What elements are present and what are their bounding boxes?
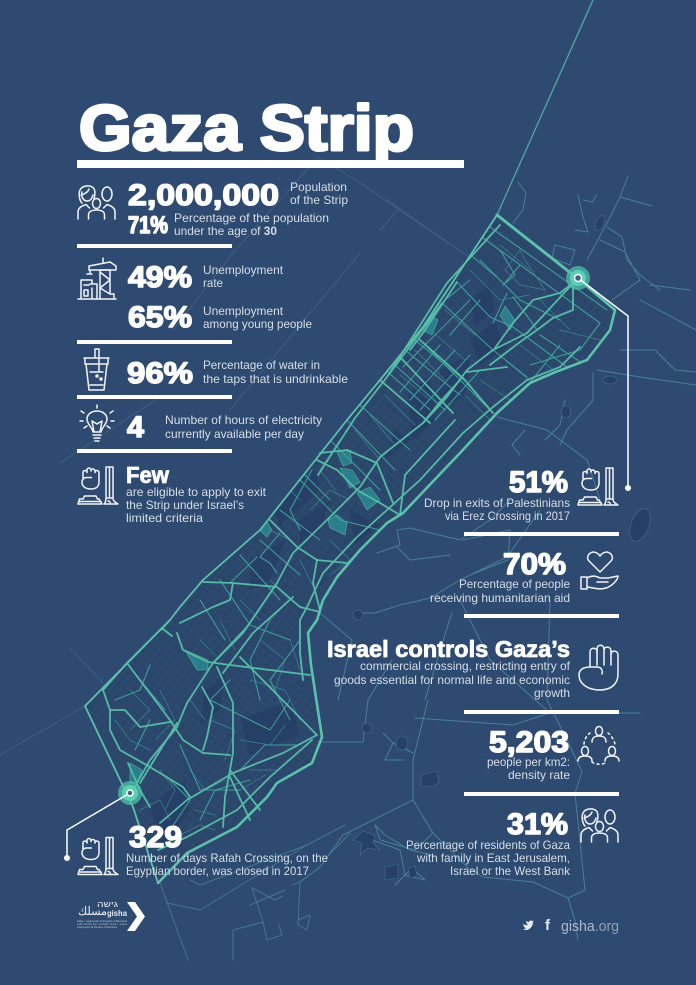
label: aid: receiving humanitarian aid <box>430 591 570 605</box>
logo: Gisha: גישה – מרכז לשמירה על הזכות לנוע <box>77 923 127 926</box>
label: commercial crossing: commercial crossing, restricting entry of <box>360 659 571 673</box>
icon: twitter <box>523 920 534 930</box>
label: few <box>126 485 267 525</box>
secondary streets <box>115 227 607 830</box>
logo: Gisha: Gisha – Legal Center for Freedom of Movement <box>77 920 127 923</box>
number: unemployment rate: 49% <box>128 261 192 294</box>
number: Erez exits: 51% <box>509 466 568 499</box>
stat: Rafah Crossing <box>78 821 328 878</box>
icon: raised hand and barrier <box>78 467 118 504</box>
pin: Erez Crossing <box>566 266 631 491</box>
stat: humanitarian aid <box>430 548 618 605</box>
label: families: Percentage of residents of Gaza <box>406 838 570 852</box>
stat: unemployment <box>78 258 312 334</box>
logo: Gisha: גישה <box>97 900 119 909</box>
icon: crane and buildings <box>78 258 116 299</box>
stat: exit permits <box>78 462 267 525</box>
heading: Israel controls Gaza's: Israel controls Gaza’s <box>327 636 570 662</box>
label: commercial crossing: goods essential for normal life and economic <box>334 673 570 687</box>
logo: Gisha: Legal Center for Freedom of Movement <box>77 926 117 929</box>
icon: glass of water <box>84 349 109 390</box>
strip boundary <box>85 215 615 883</box>
label: commercial crossing: growth <box>534 686 570 700</box>
label: youth unemployment: Unemployment <box>203 304 284 318</box>
logo: Gisha: مسلك <box>78 904 107 918</box>
label: water: Percentage of water in <box>203 358 320 372</box>
long teal road to the north <box>497 0 593 215</box>
label: Erez exits <box>424 496 570 523</box>
logo: Gisha <box>77 900 145 931</box>
heading: few: Few <box>126 462 169 488</box>
label: electricity: Number of hours of electricity <box>165 413 322 427</box>
stat: density <box>487 726 619 782</box>
label: young population: under the age of 30 <box>174 224 277 238</box>
stat: commercial crossing <box>327 636 618 700</box>
label: Rafah <box>126 851 328 878</box>
label: water: the taps that is undrinkable <box>203 372 348 386</box>
label: density: people per km2: <box>487 755 570 769</box>
fine winding streets <box>115 245 600 840</box>
stat: divided families <box>406 808 618 878</box>
title: Gaza Strip <box>79 92 414 164</box>
icon: light bulb <box>80 405 114 441</box>
website: gisha.org <box>561 918 619 935</box>
icon: heart in hand <box>581 552 618 589</box>
label: young population: Percentage of the population <box>174 211 329 225</box>
number: water: 96% <box>127 357 193 390</box>
dark city blocks <box>150 285 505 850</box>
faint sea lines <box>0 157 470 755</box>
stat: Erez exits <box>424 466 618 523</box>
label: electricity: currently available per day <box>165 427 304 441</box>
label: unemployment rate <box>203 263 284 290</box>
label: aid: Percentage of people <box>459 577 570 591</box>
icon: people in a circle <box>578 726 619 764</box>
label: Rafah: Number of days Rafah Crossing, on the <box>126 851 328 865</box>
social links <box>523 917 619 935</box>
dark water blobs <box>353 214 654 880</box>
teal patches <box>130 306 515 783</box>
label: population: Population <box>290 180 347 194</box>
number: electricity: 4 <box>127 411 144 444</box>
label: Erez exits: via Erez Crossing in 2017 <box>445 509 570 523</box>
icon: raised hand <box>579 645 618 690</box>
number: population: 2,000,000 <box>128 179 279 212</box>
label: families: with family in East Jerusalem, <box>416 851 570 865</box>
label: youth unemployment <box>203 304 312 331</box>
surrounding roads <box>160 176 696 960</box>
icon: raised hand and barrier <box>78 838 118 874</box>
label: few: the Strip under Israel’s <box>126 498 244 512</box>
label: aid <box>430 577 570 605</box>
label: density: density rate <box>508 768 570 782</box>
stat: electricity <box>80 405 322 444</box>
stat: population <box>78 179 348 239</box>
number: density: 5,203 <box>489 726 569 759</box>
label: families: Israel or the West Bank <box>450 864 571 878</box>
number: youth unemployment: 65% <box>128 301 192 334</box>
label: few: limited criteria <box>126 511 203 525</box>
number: young population: 71% <box>128 212 168 239</box>
label: young population <box>174 211 329 238</box>
label: density <box>487 755 570 782</box>
main teal roads <box>103 225 580 850</box>
number: Rafah: 329 <box>129 821 182 854</box>
label: population <box>290 180 348 207</box>
label: unemployment rate: rate <box>203 276 223 290</box>
number: aid: 70% <box>503 548 566 581</box>
label: population: of the Strip <box>290 193 348 207</box>
label: Rafah: Egyptian border, was closed in 2017 <box>126 864 309 878</box>
label: unemployment rate: Unemployment <box>203 263 284 277</box>
icon: facebook: f <box>545 917 551 934</box>
icon: people <box>78 186 115 219</box>
label: electricity <box>165 413 322 441</box>
strip street texture <box>80 210 620 890</box>
logo: Gisha: gisha <box>107 908 127 918</box>
label: commercial crossing <box>334 659 571 700</box>
label: few: are eligible to apply to exit <box>126 485 267 499</box>
label: Erez exits: Drop in exits of Palestinians <box>424 496 570 510</box>
icon: people <box>581 809 618 842</box>
stat: water <box>84 349 348 390</box>
label: water <box>203 358 348 386</box>
icon: raised hand and barrier <box>578 468 618 505</box>
label: youth unemployment: among young people <box>203 317 312 331</box>
number: families: 31% <box>507 808 568 841</box>
pin: Rafah Crossing <box>64 781 142 861</box>
label: families <box>406 838 571 878</box>
